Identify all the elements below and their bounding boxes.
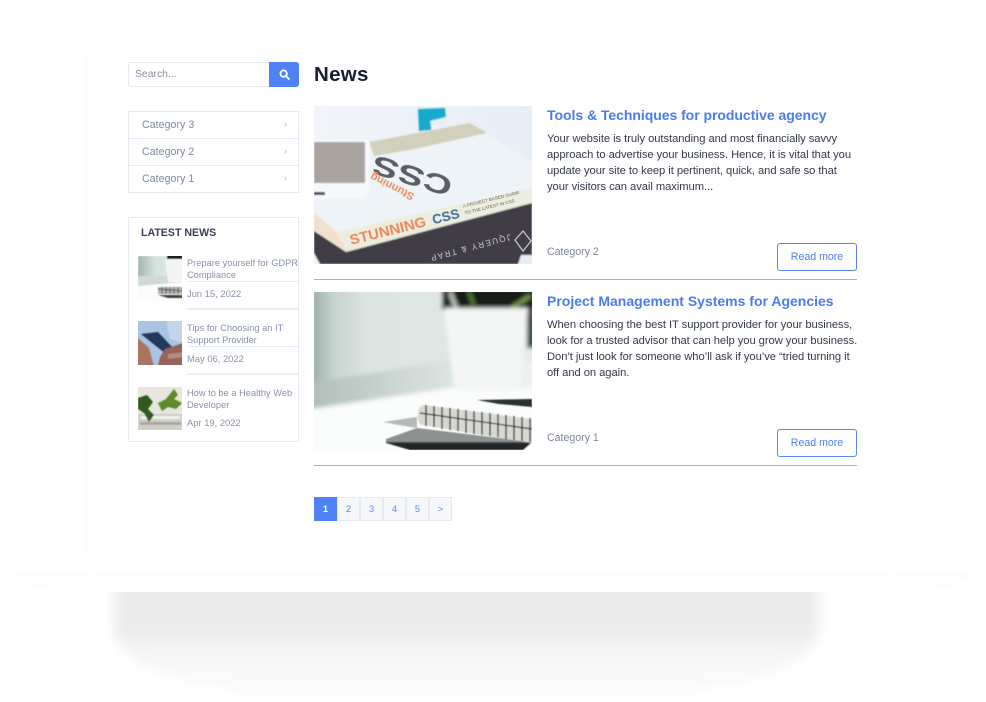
article 1 text: Your website is truly outstanding and most financially savvy bbox=[547, 133, 837, 145]
article 1 text bbox=[547, 133, 851, 193]
category 2: Category 2 bbox=[142, 146, 194, 158]
search input: Search... bbox=[135, 69, 177, 80]
article 2 heading: Project Management Systems for Agencies bbox=[547, 293, 834, 309]
pagination bbox=[314, 497, 452, 521]
article 1 category: Category 2 bbox=[547, 246, 599, 258]
page 2: 2 bbox=[346, 503, 351, 514]
page 5: 5 bbox=[415, 503, 420, 514]
page 3 bbox=[360, 497, 383, 521]
icon: magnifier bbox=[280, 70, 290, 80]
article 2 read more button: Read more bbox=[791, 437, 843, 449]
page 2 bbox=[337, 497, 360, 521]
title: Prepare yourself for GDPR bbox=[187, 258, 298, 268]
page 4: 4 bbox=[392, 503, 397, 514]
divider bbox=[187, 346, 298, 347]
page 5 bbox=[406, 497, 429, 521]
book spine lettering: STUNNING bbox=[348, 213, 428, 249]
title: Tips for Choosing an IT bbox=[187, 323, 283, 333]
title: Compliance bbox=[187, 270, 236, 280]
category 1 bbox=[128, 165, 299, 193]
thumbnail: plant on books bbox=[138, 387, 182, 430]
bottom divider bbox=[187, 308, 299, 310]
title bbox=[187, 388, 292, 410]
title: How to be a Healthy Web bbox=[187, 388, 292, 398]
article 2 read more button bbox=[777, 429, 857, 457]
search box bbox=[128, 62, 299, 87]
device screen bbox=[88, 27, 898, 582]
divider bbox=[314, 465, 857, 466]
device base bbox=[16, 572, 970, 592]
article 2 image: notebook and plant bbox=[314, 292, 532, 450]
date: Apr 19, 2022 bbox=[187, 417, 241, 428]
category 3: › bbox=[284, 119, 287, 129]
page 4 bbox=[383, 497, 406, 521]
date: Jun 15, 2022 bbox=[187, 288, 241, 299]
category 2 bbox=[128, 138, 299, 166]
panel: latest news bbox=[128, 217, 299, 442]
book cover lettering: CSS bbox=[368, 149, 456, 202]
category 3: Category 3 bbox=[142, 119, 194, 131]
article 1 heading: Tools & Techniques for productive agency bbox=[547, 107, 826, 123]
title bbox=[187, 258, 298, 280]
next page bbox=[429, 497, 452, 521]
next page: > bbox=[438, 503, 443, 514]
news item 3 bbox=[138, 387, 292, 430]
book spine lettering: A PROJECT BASED GUIDE bbox=[462, 190, 520, 209]
article 1 read more button bbox=[777, 243, 857, 271]
divider bbox=[314, 279, 857, 280]
article 2 text: Don’t just look for someone who’ll ask if you’ve “tried turning it bbox=[547, 351, 850, 363]
latest news heading: LATEST NEWS bbox=[141, 227, 216, 239]
thumbnail: hands with phone bbox=[138, 321, 182, 365]
article 2 text bbox=[547, 319, 857, 379]
bottom divider bbox=[187, 373, 299, 375]
search button bbox=[269, 62, 299, 87]
shadow gradient shape bbox=[114, 572, 818, 700]
article 2 text: look for a trusted advisor that can help you grow your business. bbox=[547, 335, 857, 347]
title: Support Provider bbox=[187, 335, 257, 345]
divider bbox=[187, 281, 298, 282]
page 1 active bbox=[314, 497, 337, 521]
date: May 06, 2022 bbox=[187, 353, 244, 364]
search input bbox=[128, 62, 270, 87]
category 3 bbox=[128, 111, 299, 139]
article 1 text: update your site to keep it pertinent, quick, and safe so that bbox=[547, 165, 837, 177]
book spine lettering: TO THE LATEST IN CSS bbox=[464, 198, 515, 215]
title bbox=[187, 323, 284, 345]
title: News bbox=[314, 63, 369, 86]
category 1: Category 1 bbox=[142, 173, 194, 185]
article 2 text: off and on again. bbox=[547, 367, 629, 379]
article 2 category: Category 1 bbox=[547, 432, 599, 444]
page 1 active: 1 bbox=[323, 503, 328, 514]
book spine lettering: CSS bbox=[431, 206, 461, 227]
book spine lettering bbox=[348, 190, 523, 249]
page 3: 3 bbox=[369, 503, 374, 514]
category list bbox=[128, 111, 299, 193]
article 1 text: your visitors can avail maximum... bbox=[547, 181, 713, 193]
news item 1 bbox=[138, 256, 298, 310]
news item 2 bbox=[138, 321, 298, 375]
title: Developer bbox=[187, 400, 229, 410]
category 2: › bbox=[284, 146, 287, 156]
article 2 text: When choosing the best IT support provider for your business, bbox=[547, 319, 852, 331]
thumbnail: notebook and plant bbox=[138, 256, 182, 299]
device shadow bbox=[112, 592, 820, 664]
article 1 read more button: Read more bbox=[791, 251, 843, 263]
article 1 image: CSS books: Stunning bbox=[368, 170, 416, 202]
lower book lettering: JQUERY & TRAP bbox=[428, 232, 512, 262]
article 1 text: approach to advertise your business. Hence, it is vital that you bbox=[547, 149, 851, 161]
category 1: › bbox=[284, 173, 287, 183]
article 1 image: CSS books bbox=[314, 106, 532, 264]
